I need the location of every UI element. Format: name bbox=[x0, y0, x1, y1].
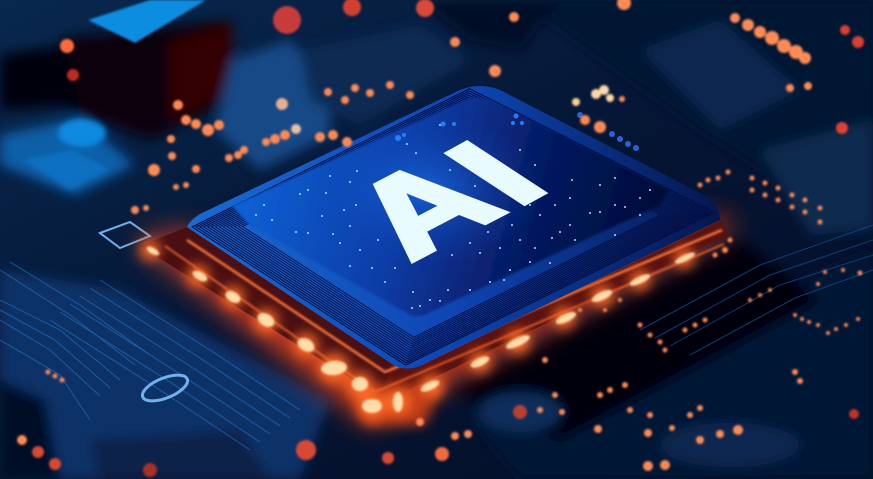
rim surface bbox=[187, 86, 720, 369]
sparkling dots on chip bbox=[255, 124, 651, 309]
top centre components bbox=[300, 25, 470, 125]
front glow bbox=[350, 385, 440, 425]
black left strip bbox=[0, 45, 80, 110]
bottom chains bbox=[542, 357, 548, 363]
bottom-right blue blur bbox=[660, 423, 800, 467]
upper-right blue component bbox=[640, 20, 800, 130]
blue specks at chip top bbox=[395, 114, 524, 141]
left base side bbox=[140, 227, 392, 398]
chip top bbox=[187, 86, 720, 369]
red side of tower bbox=[170, 22, 232, 122]
right-centre component bbox=[760, 120, 873, 235]
inner panel bbox=[232, 98, 668, 316]
lower-left traces area bbox=[0, 270, 330, 479]
orange edge lines bbox=[187, 230, 722, 372]
lower-left dark corner bbox=[0, 380, 60, 479]
bottom blue blur bbox=[478, 392, 562, 432]
socket icon left bbox=[100, 222, 150, 248]
circuit traces lower left bbox=[0, 262, 300, 450]
left cyan connector bbox=[22, 150, 110, 190]
socket icon lower left bbox=[139, 370, 191, 406]
top cluster bbox=[273, 6, 301, 34]
pad cores bbox=[145, 245, 696, 413]
chip base bbox=[140, 220, 728, 425]
contour lines bbox=[192, 89, 714, 365]
upper-right dark region bbox=[520, 0, 873, 240]
lower-left dark band bbox=[90, 430, 270, 479]
left blue pad bbox=[0, 118, 135, 195]
pad halos bbox=[140, 240, 694, 420]
traces right of chip bbox=[640, 225, 873, 355]
AI lettering: I bbox=[414, 121, 578, 225]
dark tower component bbox=[62, 20, 232, 140]
dark gap right of chip bbox=[450, 240, 820, 440]
top-left bright blue component bbox=[88, 0, 206, 43]
glowing contact pads bbox=[140, 240, 696, 420]
top centre dark block bbox=[420, 0, 560, 50]
right base side bbox=[382, 220, 728, 398]
chip base glow bbox=[135, 215, 735, 425]
lower-left lights bbox=[17, 435, 27, 445]
top-left cluster bbox=[60, 39, 74, 53]
AI lettering: A bbox=[317, 135, 530, 280]
right dotted chains bbox=[793, 313, 797, 317]
lower-right board bbox=[470, 250, 873, 479]
panel glow bbox=[305, 112, 545, 268]
right-side blue specks bbox=[577, 112, 639, 151]
blue chip block bbox=[215, 40, 330, 170]
left cyan pad bbox=[58, 119, 106, 147]
right lattice bbox=[750, 176, 754, 180]
right strip lights bbox=[730, 13, 740, 23]
chip top-right cluster bbox=[572, 98, 580, 106]
